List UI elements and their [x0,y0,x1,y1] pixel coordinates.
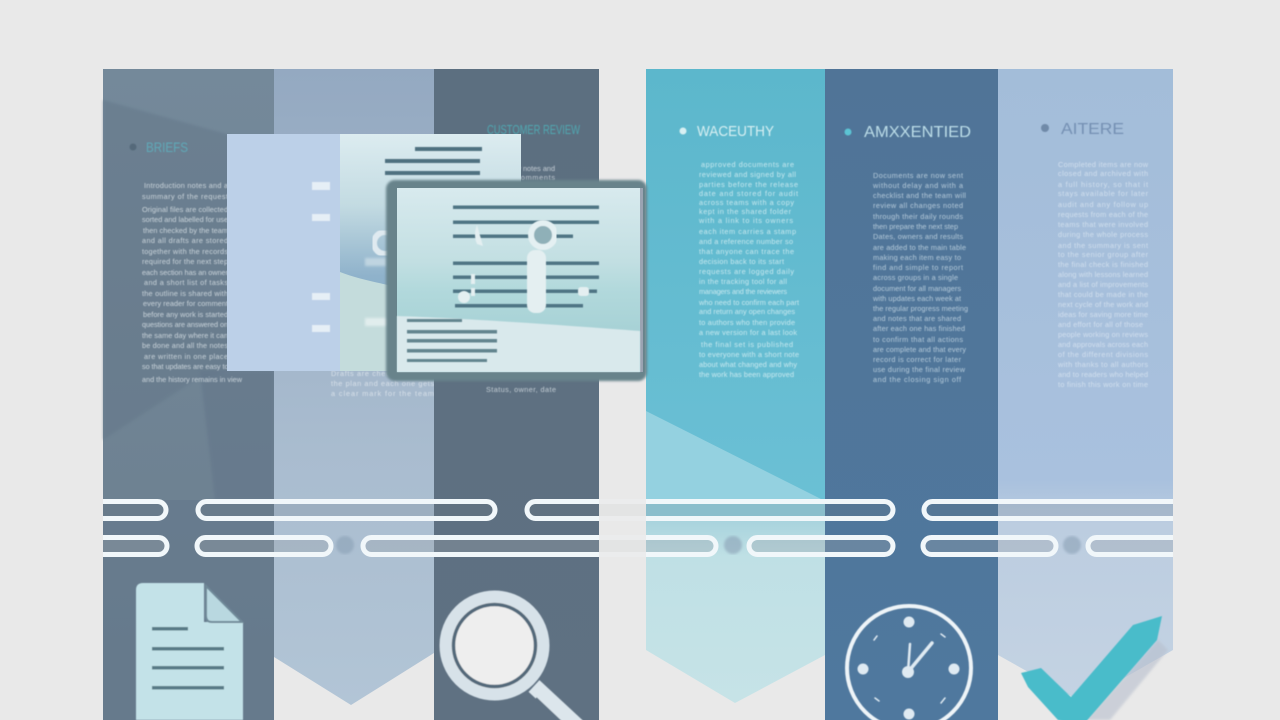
text block: column 5 body: find and simple to report [873,263,963,272]
text block: column 5 body: checklist and the team will [873,191,966,200]
text block: column 2 body: a clear mark for the team [331,389,434,398]
text block: column 6 body: people working on reviews [1058,330,1148,339]
text block: column 4 body: kept in the shared folder [699,207,792,216]
heading: column 5: AMXXENTIED [864,124,971,141]
text block: column 2 body: the plan and each one gets [331,379,434,388]
text block: column 6 body: teams that were involved [1058,220,1148,229]
text block: column 5 body: and notes that are shared [873,314,961,323]
panel: column 1 slate [103,69,274,720]
text block: column 5 body: across groups in a single [873,273,958,282]
text lines: back document [385,147,482,175]
text block: column 6 body: closed and archived with [1058,169,1148,178]
text block: column 6 body: during the whole process [1058,230,1148,239]
text block: column 4 body: date and stored for audit [699,189,798,198]
panel: column 6 pale blue [998,69,1173,702]
text block: column 6 body: and a list of improvements [1058,280,1148,289]
text block: column 5 body: are complete and that every [873,345,966,354]
text block: column 4 body: managers and the reviewers [699,287,787,296]
text block: column 1 body: and the history remains in view [142,375,243,384]
text block: column 2 body [331,369,434,398]
text block: column 1 body: and all drafts are stored [142,236,228,245]
text block: column 5 body: through their daily rounds [873,212,963,221]
text block: column 1 body: every reader for comment [143,299,228,308]
text block: column 1 body: questions are answered on [142,320,228,329]
icon: check mark [1021,616,1168,720]
text block: column 1 body: sorted and labelled for use [142,215,228,224]
heading: column 6 [1041,121,1124,138]
text block: column 1 body: before any work is started [143,310,228,319]
text block: column 4 body [698,160,799,379]
text block: column 6 body: and effort for all of those [1058,320,1143,329]
text block: column 5 body: without delay and with a [872,181,964,190]
text block: column 4 body: approved documents are [701,160,794,169]
text block: column 1 body: summary of the request [142,192,228,201]
text block: column 1 body: required for the next step [142,257,228,266]
overlay card: front document frame [386,180,647,381]
text block: column 5 body: document for all managers [873,284,961,293]
text block: column 4 body: reviewed and signed by all [699,170,796,179]
text block: column 5 body: the regular progress meeting [873,304,968,313]
heading: column 3: CUSTOMER REVIEW [487,122,581,137]
text block: column 1 body: are written in one place [144,352,228,361]
text block: column 4 body: requests are logged daily [699,267,794,276]
text block: column 6 body: and to readers who helped [1058,370,1148,379]
text block: column 5 body: Documents are now sent [873,171,963,180]
text block: column 6 body: and the summary is sent [1058,241,1148,250]
text block: column 6 body: with thanks to all authors [1057,360,1148,369]
text block: column 3 notes: Review notes and [497,164,555,173]
text block: column 4 body: about what changed and why [699,360,797,369]
text block: column 4 body: with a link to its owners [698,216,793,225]
text block: column 1 body: together with the records [142,247,228,256]
heading: column 1 [130,139,188,155]
text block: column 4 body: and return any open changes [699,307,795,316]
text block: column 5 body: after each one has finished [873,324,965,333]
connector row 2 [60,538,1218,554]
tabs: back document [312,182,330,332]
text block: column 5 body: are added to the main table [873,243,966,252]
text lines: front document lower [407,319,497,362]
text block: column 5 body: use during the final review [873,365,966,374]
text block: column 4 body: decision back to its start [699,257,784,266]
text block: column 4 body: that anyone can trace the [699,247,794,256]
text block: column 4 body: the work has been approved [699,370,794,379]
text block: column 4 body: to authors who then provide [699,318,795,327]
icon: magnifying glass [446,596,590,720]
heading: column 1: BRIEFS [146,139,188,155]
icon: clock [847,606,971,720]
panel: column 5 blue [825,69,998,720]
text block: column 1 body: so that updates are easy to find [142,362,242,371]
text block: column 4 body: in the tracking tool for all [699,277,787,286]
panel: column 3 dark slate [434,69,599,720]
text block: column 5 body: review all changes noted [873,201,963,210]
text block: column 6 body: next cycle of the work and [1058,300,1148,309]
text block: column 1 body: the same day where it can [142,331,228,340]
text block: column 4 body: parties before the release [699,180,798,189]
text block: column 4 body: each item carries a stamp [699,227,796,236]
text block: column 3 notes: Status, owner, date [486,385,556,394]
icon: document [136,583,243,720]
heading: column 4: WACEUTHY [697,123,774,140]
smudges: back document [365,258,390,326]
text block: column 5 body: to confirm that all actions [873,335,963,344]
text block: column 6 body: stays available for later [1058,189,1149,198]
text block: column 5 body [872,171,968,384]
text block: column 5 body: Dates, owners and results [873,232,963,241]
icon: back document ring [374,232,396,254]
text block: column 4 body: to everyone with a short note [699,350,799,359]
text block: column 6 body: a full history, so that it [1058,180,1148,189]
text block: column 1 body: then checked by the team [143,226,228,235]
text block: column 2 body: Drafts are checked against [331,369,434,378]
overlay card: back document [227,134,521,371]
text block: column 4 body: and a reference number so [699,237,793,246]
text block: column 1 body: the outline is shared with [142,289,228,298]
text block: column 6 body: ideas for saving more time [1058,310,1148,319]
text block: column 6 body: Completed items are now [1058,160,1149,169]
text block: column 6 body: requests from each of the [1058,210,1148,219]
text block: column 5 body: then prepare the next step [873,222,958,231]
text block: column 6 body: and approvals across each [1058,340,1148,349]
text block: column 6 body [1057,160,1149,389]
text block: column 1 body: Introduction notes and a [144,181,229,190]
text block: column 4 body: a new version for a last look [699,328,797,337]
text block: column 5 body: record is correct for later [873,355,962,364]
heading: column 6: AITERE [1061,121,1124,138]
text block: column 6 body: that could be made in the [1058,290,1148,299]
panel: column 4 teal [646,69,825,703]
gap fade over connectors [599,495,646,560]
text block: column 3 notes: final comments [497,173,555,182]
text block: column 1 body: Original files are collected [142,205,228,214]
text block: column 6 body: of the different divisions [1058,350,1148,359]
text block: column 6 body: audit and any follow up [1058,200,1148,209]
text block: column 5 body: making each item easy to [873,253,961,262]
text block: column 1 body: each section has an owner [142,268,229,277]
process connectors [60,502,1224,554]
text block: column 6 body: to finish this work on time [1058,380,1148,389]
text block: column 4 body: the final set is published [701,340,793,349]
text lines: front document upper [453,206,599,308]
text block: column 1 body [142,181,243,384]
text block: column 5 body: and the closing sign off [873,375,962,384]
text block: column 5 body: with updates each week at [872,294,961,303]
text block: column 6 body: to the senior group after [1058,250,1149,259]
connector row 1 [60,502,1224,518]
icon: magnifier on document [527,223,555,313]
text block: column 1 body: and a short list of tasks [144,278,228,287]
icon: document markers [458,225,589,303]
text block: column 6 body: along with lessons learned [1058,270,1148,279]
text block: column 4 body: who need to confirm each part [698,298,799,307]
text block: column 6 body: the final check is finished [1058,260,1148,269]
text block: column 1 body: be done and all the notes [142,341,228,350]
connector nodes [336,536,1081,554]
text block: column 3 notes [486,164,556,394]
panel: column 2 light slate [274,69,434,705]
text block: column 4 body: across teams with a copy [699,198,794,207]
